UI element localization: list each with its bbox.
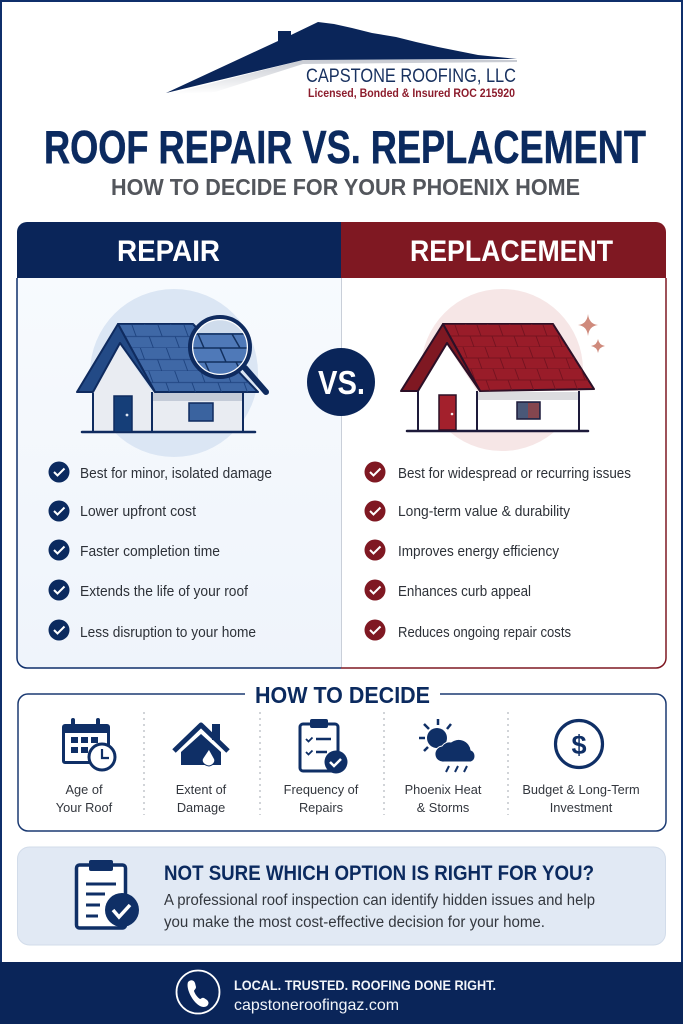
panel: call to action: [18, 847, 666, 945]
repair item 3: Faster completion time: [80, 543, 220, 560]
repair header: [17, 222, 341, 278]
company name: CAPSTONE ROOFING, LLC: [306, 66, 516, 87]
replacement item 3: Improves energy efficiency: [398, 543, 559, 560]
label: frequency of repairs: Repairs: [299, 800, 343, 815]
VS badge: VS.: [318, 364, 365, 401]
icon: calendar and clock: [62, 720, 115, 770]
factor: frequency of repairs: [284, 719, 359, 815]
replacement header: [341, 222, 666, 278]
replacement header: REPLACEMENT: [410, 235, 613, 268]
replacement item 1: Best for widespread or recurring issues: [398, 465, 631, 482]
repair benefit list: [48, 462, 272, 641]
logo: Capstone Roofing: [166, 22, 517, 100]
repair item 1: [48, 462, 272, 482]
icon: red house with sparkles: [401, 289, 605, 451]
label: frequency of repairs: Frequency of: [284, 782, 359, 797]
label: phoenix heat and storms: & Storms: [417, 800, 469, 815]
factor: extent of damage: [174, 724, 228, 815]
license line: Licensed, Bonded & Insured ROC 215920: [308, 88, 515, 100]
repair item 3: [48, 540, 220, 560]
factor: age of roof: [56, 720, 115, 815]
replacement item 2: Long-term value & durability: [398, 503, 570, 520]
CTA body text: you make the most cost-effective decision for your home.: [164, 914, 545, 931]
repair item 1: Best for minor, isolated damage: [80, 465, 272, 482]
repair header: REPAIR: [117, 235, 220, 268]
repair item 5: Less disruption to your home: [80, 624, 256, 641]
repair item 4: [48, 580, 249, 600]
panel: how to decide: [18, 682, 666, 831]
footer website: capstoneroofingaz.com: [234, 997, 399, 1014]
icon: blue house with magnifier: [77, 289, 266, 457]
subtitle: HOW TO DECIDE FOR YOUR PHOENIX HOME: [111, 174, 580, 200]
label: extent of damage: Damage: [177, 800, 225, 815]
repair item 5: [48, 620, 256, 641]
label: budget and long-term investment: Budget & Long-Term: [522, 782, 640, 797]
icon: inspection clipboard: [76, 860, 139, 928]
CTA heading: NOT SURE WHICH OPTION IS RIGHT FOR YOU?: [164, 862, 594, 885]
replacement item 1: [364, 462, 631, 482]
replacement item 3: [364, 540, 559, 560]
replacement item 5: Reduces ongoing repair costs: [398, 624, 571, 641]
VS badge: [307, 348, 375, 416]
replacement item 4: [364, 580, 531, 600]
factor: budget and investment: [522, 720, 640, 815]
replacement benefit list: [364, 462, 631, 641]
panel: comparison: [17, 222, 666, 668]
repair item 4: Extends the life of your roof: [80, 583, 249, 600]
repair item 2: Lower upfront cost: [80, 503, 197, 520]
icon: phone: [176, 970, 220, 1014]
icon: clipboard with check: [300, 719, 348, 774]
label: budget and long-term investment: Investment: [550, 800, 613, 815]
label: age of your roof: Your Roof: [56, 800, 113, 815]
replacement item 4: Enhances curb appeal: [398, 583, 531, 600]
how to decide heading: HOW TO DECIDE: [255, 682, 430, 708]
replacement item 5: [364, 620, 571, 641]
CTA body text: A professional roof inspection can identify hidden issues and help: [164, 892, 595, 909]
factor: phoenix heat and storms: [405, 719, 482, 815]
logo roof mark: [166, 22, 517, 94]
replacement item 2: [364, 500, 570, 522]
panel: repair: [17, 222, 341, 668]
panel: replacement: [341, 222, 666, 668]
icon: dollar coin: $: [571, 730, 587, 760]
label: phoenix heat and storms: Phoenix Heat: [405, 782, 482, 797]
label: age of your roof: Age of: [66, 782, 103, 797]
repair item 2: [48, 500, 197, 522]
footer: [0, 962, 683, 1024]
icon: house with water drop: [174, 724, 228, 766]
icon: sun, cloud and rain: [419, 719, 475, 772]
footer tagline: LOCAL. TRUSTED. ROOFING DONE RIGHT.: [234, 978, 496, 993]
label: extent of damage: Extent of: [176, 782, 227, 797]
